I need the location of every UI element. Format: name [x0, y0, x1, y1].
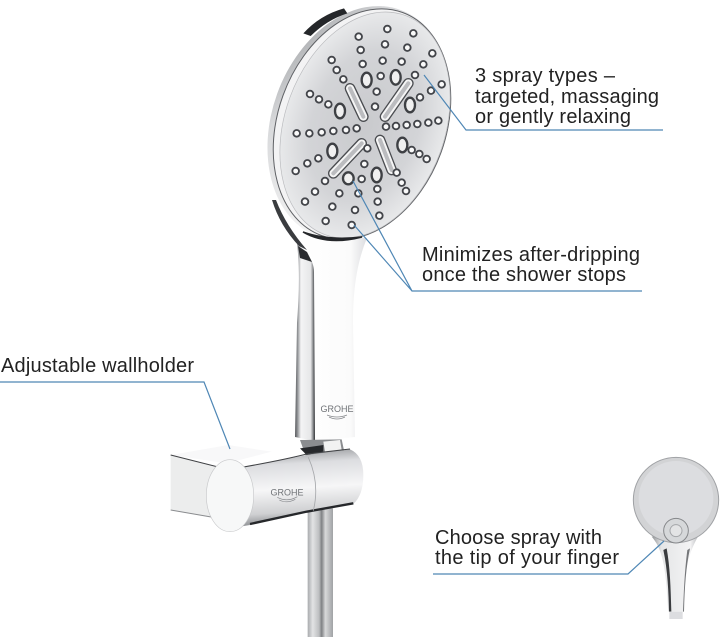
- head outer rim: [236, 0, 483, 267]
- handle right panel: [300, 235, 367, 441]
- large nozzles: [327, 70, 415, 184]
- head lower rim reflections: [272, 200, 362, 250]
- hose: [308, 508, 333, 637]
- shower handle: [295, 235, 367, 441]
- spray slots: [333, 83, 408, 173]
- callout: after-dripping: Minimizes after-dripping: [422, 244, 640, 266]
- shower head: [236, 0, 483, 267]
- small nozzles: [292, 26, 445, 228]
- clamp logo: [271, 487, 303, 502]
- clamp logo: GROHE: [271, 487, 303, 497]
- callout: spray types: [424, 65, 663, 130]
- callout: after-dripping: [353, 181, 642, 291]
- spray button: [664, 518, 688, 543]
- cap: [206, 460, 254, 532]
- callout: choose spray: [433, 527, 664, 574]
- callout: spray types: or gently relaxing: [475, 106, 631, 128]
- callout: wallholder: Adjustable wallholder: [1, 355, 194, 377]
- wall holder and hose: [171, 439, 363, 637]
- callout: choose spray: Choose spray with: [435, 527, 602, 549]
- callout: spray types: targeted, massaging: [475, 86, 659, 108]
- handle left panel: [295, 243, 315, 441]
- wall block: [171, 445, 272, 517]
- callout: wallholder: [0, 355, 230, 449]
- callout: choose spray: the tip of your finger: [435, 547, 619, 569]
- small handle: [652, 533, 700, 612]
- swivel joint: [300, 439, 345, 458]
- small head: [633, 457, 719, 543]
- small handset illustration: [633, 457, 719, 619]
- handle logo: GROHE: [320, 404, 354, 414]
- head face: [250, 0, 480, 262]
- callout: spray types: 3 spray types –: [475, 65, 616, 87]
- handle logo: [320, 404, 354, 419]
- callout: after-dripping: once the shower stops: [422, 264, 626, 286]
- clamp cylinder: [240, 449, 363, 527]
